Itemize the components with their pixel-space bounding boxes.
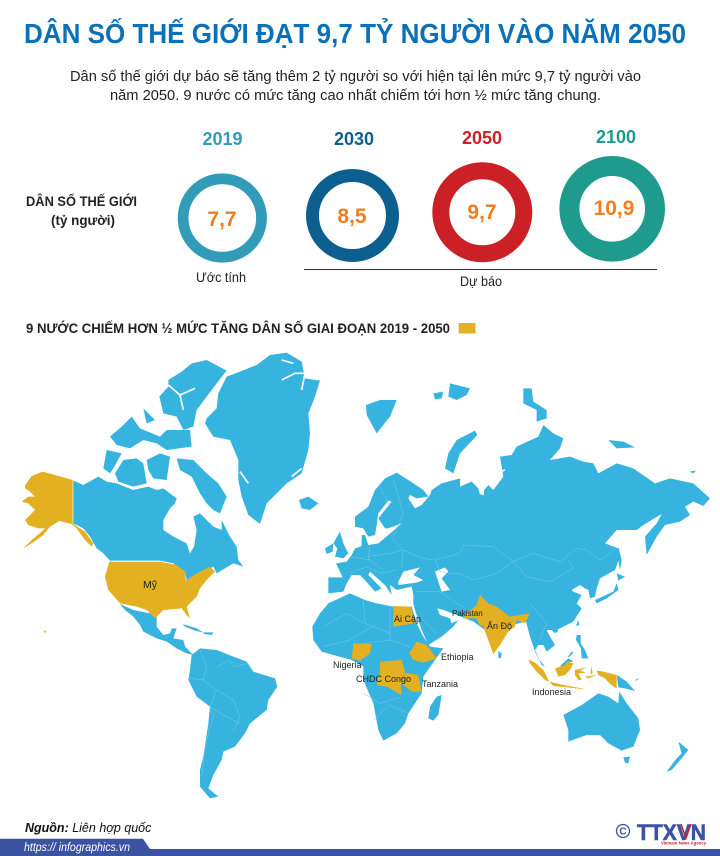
highlighted countries in africa and south asia — [352, 595, 530, 695]
donut: 2050: 2050 — [462, 128, 502, 148]
footer bar: https:// infographics.vn — [24, 840, 130, 854]
eurasia — [328, 383, 710, 667]
source: Nguồn: Liên hợp quốc — [25, 821, 152, 835]
logo: TTXVN: TTXVN — [637, 820, 706, 845]
country labels: Ethiopia — [441, 652, 474, 662]
donut: 2100: 2100 — [596, 127, 636, 147]
africa, oceania and highlighted countries — [312, 593, 688, 772]
country labels: Pakistan — [452, 609, 483, 618]
row label: world population — [26, 192, 137, 228]
donut: 2030 — [312, 129, 392, 256]
intro text — [70, 68, 641, 104]
country labels: Ấn Độ — [487, 621, 512, 631]
donut: 2030: 8,5 — [337, 205, 367, 228]
world map — [22, 353, 710, 798]
donut: 2050: 9,7 — [467, 201, 497, 224]
donut: 2030: 2030 — [334, 129, 374, 149]
title: DÂN SỐ THẾ GIỚI ĐẠT 9,7 TỶ NGƯỜI VÀO NĂM 2050 — [24, 17, 686, 49]
country labels — [143, 579, 571, 697]
country labels: Ai Cập — [394, 614, 421, 624]
logo: TTXVN: C — [619, 826, 627, 838]
americas and north atlantic land — [73, 353, 348, 580]
donut: 2100 — [569, 127, 655, 252]
southeast asia islands and indonesia — [528, 620, 639, 691]
intro text: Dân số thế giới dự báo sẽ tăng thêm 2 tỷ người so với hiện tại lên mức 9,7 tỷ người vào — [70, 68, 641, 85]
footer bar — [0, 839, 720, 856]
donut: 2050 — [441, 128, 524, 254]
row label: world population: DÂN SỐ THẾ GIỚI — [26, 192, 137, 209]
donut: 2019 — [183, 129, 262, 257]
label: estimate: Ước tính — [196, 269, 246, 285]
intro text: năm 2050. 9 nước có mức tăng cao nhất chiếm tới hơn ½ mức tăng chung. — [110, 87, 601, 104]
donut: 2019: 2019 — [202, 129, 243, 149]
donut: 2100: 10,9 — [594, 197, 634, 220]
country labels: Mỹ — [143, 579, 158, 591]
logo: TTXVN: Vietnam News Agency — [661, 840, 706, 846]
row label: world population: (tỷ người) — [51, 212, 115, 228]
country labels: Tanzania — [422, 679, 458, 689]
bracket: forecast: Dự báo — [460, 273, 502, 289]
legend swatch — [459, 323, 476, 334]
country labels: Indonesia — [532, 687, 571, 697]
country labels: Nigeria — [333, 660, 362, 670]
donut: 2019: 7,7 — [207, 208, 237, 231]
latin america — [120, 604, 277, 798]
map heading: 9 NƯỚC CHIẾM HƠN ½ MỨC TĂNG DÂN SỐ GIAI ĐOẠN 2019 - 2050 — [26, 319, 450, 336]
country labels: CHDC Congo — [356, 674, 411, 684]
alaska and contiguous usa — [22, 472, 215, 633]
